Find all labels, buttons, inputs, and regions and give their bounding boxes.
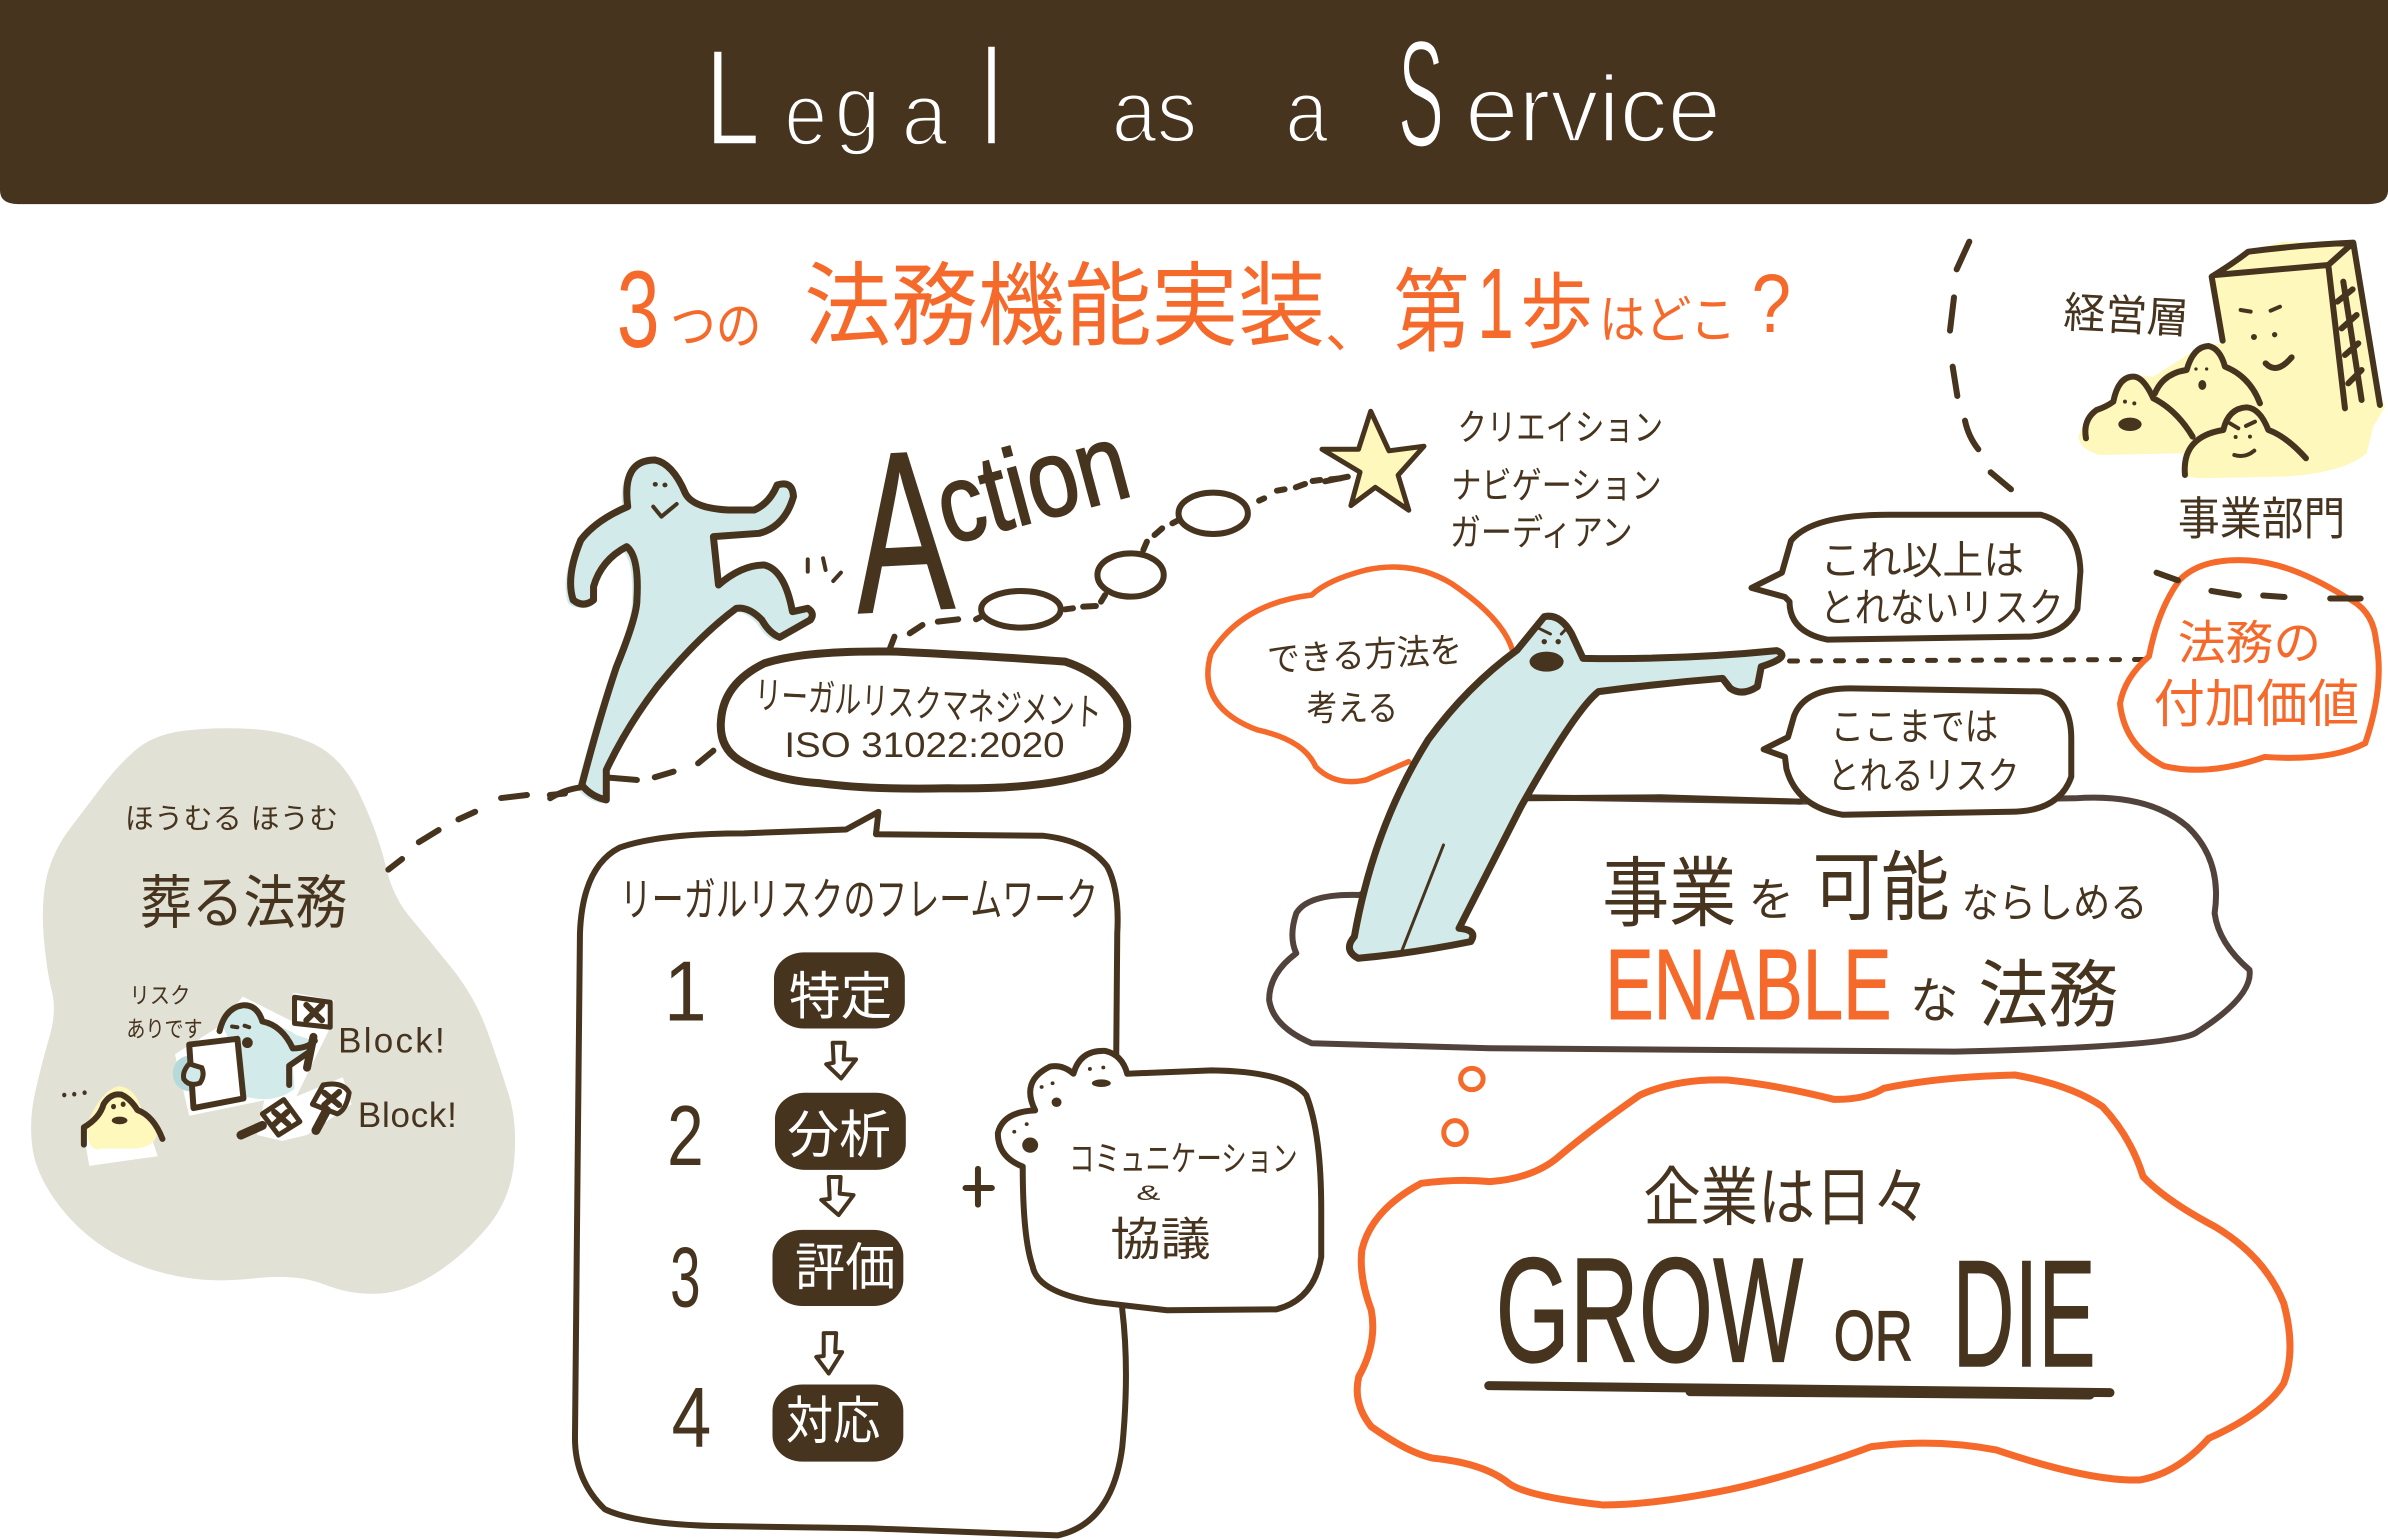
- subtitle: 歩: [1520, 268, 1593, 359]
- text: ほうむる ほうむ: ほうむる ほうむ: [125, 804, 338, 836]
- title: Action: [847, 400, 1141, 662]
- step numbers: 1: [664, 944, 707, 1039]
- text: 事業を可能ならしめる: 事業: [1602, 852, 1736, 937]
- arrow: dashed path from blob to runner: [388, 793, 565, 870]
- text: GROW: GROW: [1496, 1227, 1803, 1394]
- header band with title: [0, 0, 2388, 204]
- step numbers: 3: [670, 1231, 701, 1326]
- step labels: 分析: [787, 1106, 891, 1164]
- text: &: &: [1136, 1181, 1161, 1205]
- text: コミュニケーション: コミュニケーション: [1069, 1140, 1298, 1179]
- panel: legal risk framework: [575, 812, 1126, 1535]
- icon: down arrows: [816, 1043, 856, 1374]
- text: ここまでは: ここまでは: [1831, 707, 1998, 749]
- bubble: できる方法を考える: [1208, 567, 1513, 782]
- title: Legal as a Service: L: [705, 22, 760, 175]
- scene: management and business units: [1950, 242, 2385, 545]
- text: とれるリスク: とれるリスク: [1828, 756, 2019, 798]
- icon: building: [2212, 243, 2380, 408]
- text: 葬る法務: 葬る法務: [140, 872, 347, 936]
- subtitle: 第: [1394, 262, 1470, 364]
- step labels: 対応: [786, 1392, 880, 1450]
- text: クリエイション ナビゲーション ガーディアン: クリエイション: [1458, 407, 1663, 448]
- text: リスクありです: [126, 983, 203, 1042]
- text: DIE: DIE: [1952, 1229, 2096, 1399]
- text: 事業を可能ならしめる: [1602, 846, 2147, 937]
- step numbers: 2: [667, 1089, 704, 1184]
- text: Block!: Block!: [338, 1021, 445, 1060]
- text: 協議: 協議: [1110, 1214, 1211, 1265]
- icon: plus: [966, 1169, 992, 1205]
- arrow: dashed pointing line: [1790, 659, 2154, 661]
- subtitle: 3: [617, 249, 659, 371]
- step labels: 特定: [789, 967, 892, 1025]
- step numbers: [664, 944, 711, 1466]
- text: ENABLE な法務: ENABLE: [1605, 929, 1892, 1041]
- text: 事業を可能ならしめる: ならしめる: [1962, 880, 2147, 926]
- subtitle: ?: [1751, 259, 1791, 350]
- underline: [1489, 1386, 2110, 1395]
- text: 経営層: 経営層: [2062, 289, 2190, 344]
- yellow backdrop: [2078, 242, 2385, 478]
- subtitle: [617, 248, 1791, 371]
- text: Block!: Block!: [358, 1096, 457, 1135]
- title: Legal as a Service: a: [902, 65, 948, 164]
- text: クリエイション ナビゲーション ガーディアン: ナビゲーション: [1451, 465, 1662, 506]
- panel: 葬る法務 blob: [31, 728, 515, 1294]
- step labels: [786, 967, 896, 1450]
- icon: block paddle: [295, 997, 330, 1068]
- title: Legal as a Service: a: [1285, 62, 1329, 161]
- text: 事業を可能ならしめる: を: [1748, 874, 1794, 925]
- subtitle: 法務機能実装: [804, 256, 1325, 358]
- text: 考える: 考える: [1307, 689, 1398, 728]
- text: 付加価値: 付加価値: [2154, 675, 2359, 733]
- cloud: コミュニケーション & 協議: [998, 1051, 1321, 1310]
- subtitle: つの: [670, 297, 762, 355]
- step labels: 評価: [795, 1238, 896, 1296]
- text: 事業を可能ならしめる: 可能: [1812, 846, 1949, 931]
- icon: block paddle: [312, 1084, 349, 1130]
- text: リスクありです: ありです: [126, 1016, 203, 1042]
- icon: person A: [2085, 377, 2193, 438]
- text: 事業部門: 事業部門: [2178, 494, 2345, 545]
- thought bubbles: [1444, 1068, 1483, 1145]
- text: ENABLE な法務: な: [1910, 974, 1959, 1028]
- path: stepping stones to star: [887, 478, 1341, 657]
- text: これ以上は: これ以上は: [1820, 539, 2024, 583]
- title: Legal as a Service: g: [835, 57, 880, 156]
- text: とれないリスク: とれないリスク: [1820, 586, 2064, 630]
- figure: pointing person: [1349, 616, 1782, 958]
- bubble: これ以上はとれないリスク: [1751, 515, 2080, 640]
- text: リスクありです: リスク: [129, 983, 190, 1009]
- icon: blocking person with paper: [173, 993, 352, 1141]
- text: クリエイション ナビゲーション ガーディアン: [1450, 407, 1663, 553]
- text: ISO 31022:2020: ISO 31022:2020: [784, 726, 1065, 765]
- subtitle: 1: [1477, 248, 1514, 360]
- text: 企業は日々: 企業は日々: [1643, 1162, 1930, 1234]
- title: Legal as a Service: S: [1398, 9, 1444, 179]
- subtitle: はどこ: [1599, 291, 1736, 349]
- bubble: リーガルリスクマネジメント ISO: [721, 651, 1127, 789]
- title: Action: ction: [923, 400, 1141, 568]
- title: Legal as a Service: [705, 9, 1721, 179]
- cloud: GROW OR DIE: [1357, 1075, 2290, 1505]
- title: Legal as a Service: as: [1112, 62, 1197, 161]
- icon: person B: [2155, 346, 2260, 403]
- bubble: 法務の付加価値: [2120, 560, 2379, 770]
- icon: block paddle: [241, 1100, 300, 1135]
- icon: person C: [2185, 407, 2306, 475]
- title: Action: A: [847, 402, 958, 662]
- text: OR: OR: [1834, 1297, 1913, 1375]
- figure: running person: [550, 460, 841, 803]
- step pills: [772, 952, 906, 1462]
- bubble: ここまではとれるリスク: [1764, 688, 2071, 815]
- text: クリエイション ナビゲーション ガーディアン: ガーディアン: [1450, 512, 1633, 553]
- heading: リーガルリスクのフレームワーク: リーガルリスクのフレームワーク: [620, 874, 1098, 925]
- title: Legal as a Service: ervice: [1465, 58, 1721, 163]
- text: ENABLE な法務: 法務: [1978, 955, 2118, 1036]
- title: Legal as a Service: l: [981, 22, 1002, 175]
- icon: star: [1322, 411, 1424, 510]
- text: 法務の: 法務の: [2178, 617, 2321, 670]
- arrow: curved dashes: [1950, 242, 2011, 489]
- text: できる方法を: できる方法を: [1266, 631, 1463, 680]
- step numbers: 4: [672, 1371, 711, 1466]
- text: リーガルリスクマネジメント: リーガルリスクマネジメント: [754, 675, 1102, 735]
- subtitle: 、: [1325, 297, 1380, 359]
- title: Legal as a Service: e: [784, 65, 827, 164]
- icon: yellow person: [62, 1086, 162, 1166]
- cloud: ENABLE: [1269, 797, 2250, 1052]
